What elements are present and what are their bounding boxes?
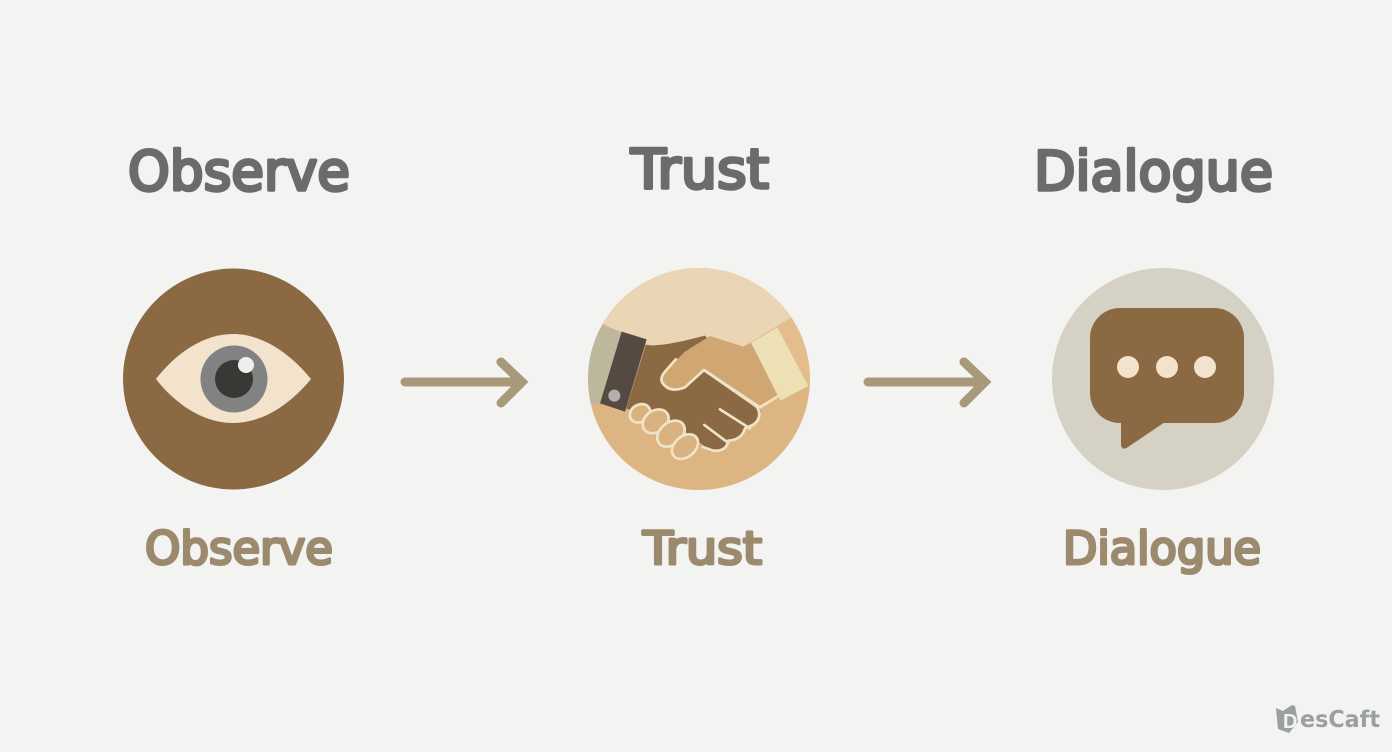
heading: Dialogue: Dialogue xyxy=(1034,140,1273,203)
label: Observe: Observe xyxy=(145,522,333,575)
icon: eye in brown circle xyxy=(123,268,344,490)
label: Dialogue: Dialogue xyxy=(1063,522,1261,575)
grey-green sleeve xyxy=(588,326,622,404)
arrow: trust to dialogue xyxy=(868,362,985,403)
dark cuff xyxy=(600,332,647,412)
right background xyxy=(778,318,810,386)
brown hand xyxy=(627,336,760,450)
label: Trust: Trust xyxy=(642,522,762,575)
icon: speech bubble in grey circle xyxy=(1052,268,1274,490)
watermark logo xyxy=(1276,705,1380,733)
watermark logo: D xyxy=(1283,711,1297,733)
heading: Trust: Trust xyxy=(630,138,769,201)
watermark logo: esCaft xyxy=(1300,707,1380,733)
fingers xyxy=(628,402,700,460)
icon: handshake in tan circle xyxy=(588,268,810,490)
arrow: observe to trust xyxy=(405,362,522,403)
hand outlines xyxy=(661,358,760,407)
cream upper band xyxy=(603,268,790,346)
tan hand xyxy=(661,336,777,407)
cream cuff xyxy=(751,327,808,401)
heading: Observe: Observe xyxy=(128,140,350,203)
